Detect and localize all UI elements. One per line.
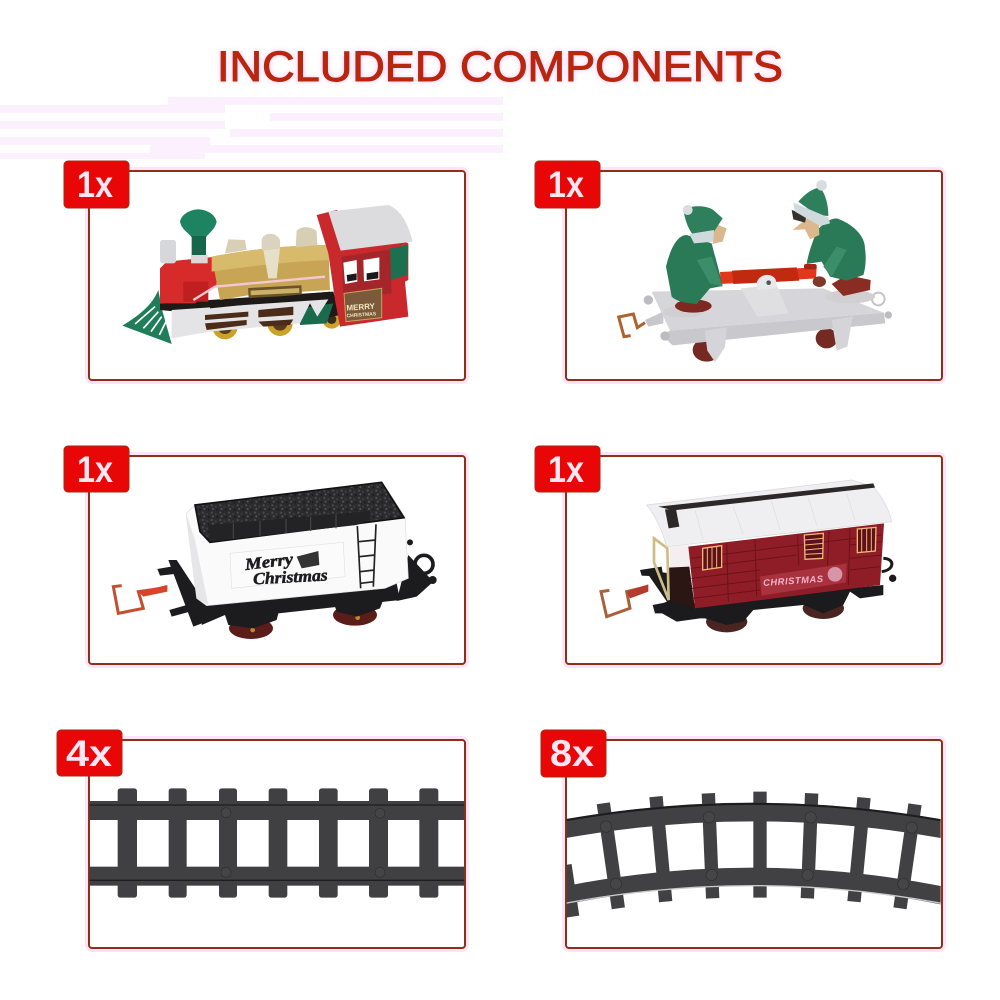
christmas lettering: CHRISTMAS [763,574,824,588]
wheels [706,611,747,632]
locomotive illustration [122,205,413,344]
red coupler hook [113,586,167,613]
badge: 1x [64,446,129,492]
gold rail [654,538,669,600]
panel: coal tender [64,446,465,664]
cab [317,210,408,327]
coal tender illustration [113,482,437,639]
panel: elf handcar [535,161,942,380]
panel border [566,171,942,380]
merry christmas lettering: Merry [243,549,295,574]
platform [652,288,883,331]
panel border [89,456,465,664]
badge: 1x: 1x [548,449,584,490]
locomotive illustration: MERRY [346,302,376,313]
smokebox [160,257,217,303]
chassis [653,585,883,625]
left elf [663,205,727,318]
panel border [89,171,465,380]
badge: 1x: 1x [77,449,113,490]
boiler [212,245,330,300]
boxcar illustration [601,480,896,632]
badge: 4x [57,730,122,776]
panel: locomotive [64,161,465,380]
panel: boxcar [535,446,942,664]
smoke stack [180,209,217,237]
wheels [693,338,721,362]
white roof [647,480,892,547]
domes [225,239,247,253]
panel border [89,740,465,948]
bell [160,240,176,263]
merry christmas lettering [243,549,328,588]
coal load [195,482,404,542]
badge: 1x [535,161,600,208]
badge: 8x [541,730,606,777]
right elf [792,180,875,303]
badge: 1x [64,161,129,208]
wheels [229,618,273,639]
curved track illustration [563,792,943,917]
title: INCLUDED COMPONENTS [217,43,783,91]
see-saw bar [720,267,817,284]
merry christmas lettering: Christmas [253,565,328,588]
badge: 4x: 4x [66,733,112,774]
panel: straight track [57,730,465,948]
christmas panel [760,563,847,596]
badge: 1x: 1x [548,164,584,205]
end platform [670,545,689,568]
pedestal [741,285,789,317]
badge: 1x [535,446,600,492]
vents [703,527,876,570]
frame [160,292,340,323]
silver rods [172,299,328,338]
chassis [202,583,400,628]
axle brackets [705,327,727,362]
elf handcar illustration [619,180,892,362]
wheels behind [322,310,341,329]
panel border [566,740,942,948]
white body [186,482,408,606]
coupler hook [601,587,647,617]
panel: curved track [541,730,943,948]
ladder [357,524,376,588]
side plate [230,542,345,588]
locomotive illustration: CHRISTMAS [346,311,377,319]
badge: 1x: 1x [77,164,113,205]
straight track illustration [89,788,464,898]
panel border [566,456,942,664]
red body [688,523,884,608]
badge: 8x: 8x [550,733,594,774]
coupler hook [619,314,645,337]
cowcatcher [122,290,172,344]
